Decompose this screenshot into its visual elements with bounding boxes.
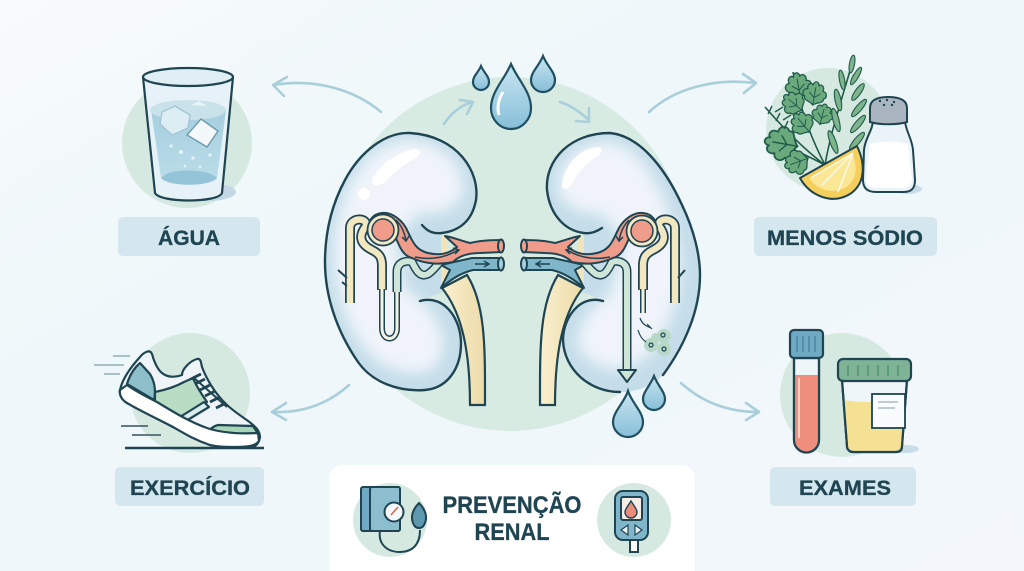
kidney outline: [325, 133, 476, 390]
arrow: out of drop: [560, 102, 589, 122]
icon circle: [780, 333, 904, 457]
left kidney: [325, 133, 504, 405]
kidney light core: [558, 142, 680, 369]
ice cubes: [160, 106, 190, 135]
speed lines: [94, 356, 161, 435]
central green circle: [333, 77, 687, 431]
ureter: [442, 275, 485, 405]
icon circle: [766, 68, 890, 192]
icon: drops bottom: [613, 376, 665, 437]
heading: [442, 491, 582, 546]
kidney outline: [547, 133, 700, 392]
label: exercício: EXERCÍCIO: [130, 477, 250, 500]
icon: lemon wedge: [800, 146, 863, 199]
label: exercício: [115, 467, 264, 506]
icon: glucose meter: [597, 483, 671, 557]
panel: title card: [329, 465, 695, 571]
vein: [441, 258, 502, 288]
icon circle: [130, 333, 250, 453]
ureter: [540, 275, 583, 405]
label: exames: [770, 467, 916, 506]
hilum pale fill: [441, 236, 448, 288]
arrow: into drop: [444, 100, 473, 124]
panel: water: [118, 68, 260, 256]
arrow: kidney to exams: [681, 383, 759, 420]
icon: blood pressure monitor: [353, 483, 427, 557]
arrow: kidney to exercise: [272, 385, 349, 420]
heading: RENAL: [474, 519, 550, 546]
icon: urine cup: [838, 359, 919, 453]
heading: PREVENÇÃO: [442, 491, 582, 519]
kidney highlight: [562, 147, 602, 189]
arrow: kidney to less sodium: [649, 74, 756, 112]
nephron tubes: [350, 219, 382, 303]
icon: blood tube: [790, 330, 823, 452]
vein: [523, 258, 584, 288]
kidney highlight: [372, 149, 420, 185]
arrow: kidney to water: [273, 77, 381, 112]
panel: exercise: [94, 333, 264, 506]
icon: glass of water: [143, 68, 236, 201]
panel: less sodium: [754, 55, 937, 256]
panel: exams: [770, 330, 919, 506]
hilum pale fill: [577, 236, 584, 288]
nephron tubes: [643, 219, 675, 303]
kidney stones: [638, 318, 671, 356]
icon: herbs: [762, 55, 868, 178]
icon: water drops top: [473, 56, 555, 129]
right kidney: [521, 133, 700, 405]
icon circle: [122, 78, 252, 208]
label: menos sódio: MENOS SÓDIO: [767, 226, 923, 250]
icon: shoe: [120, 351, 260, 447]
collecting duct with arrow: [584, 261, 627, 370]
glomerulus: [626, 216, 658, 246]
glomerulus: [368, 214, 398, 246]
artery: [370, 213, 502, 264]
label: exames: EXAMES: [799, 477, 891, 500]
icon: salt shaker: [863, 97, 922, 194]
label: menos sódio: [754, 217, 937, 256]
label: água: [118, 217, 260, 256]
ground line: [125, 447, 264, 449]
kidney light core: [334, 140, 463, 373]
label: água: ÁGUA: [158, 227, 220, 250]
artery: [523, 213, 656, 264]
